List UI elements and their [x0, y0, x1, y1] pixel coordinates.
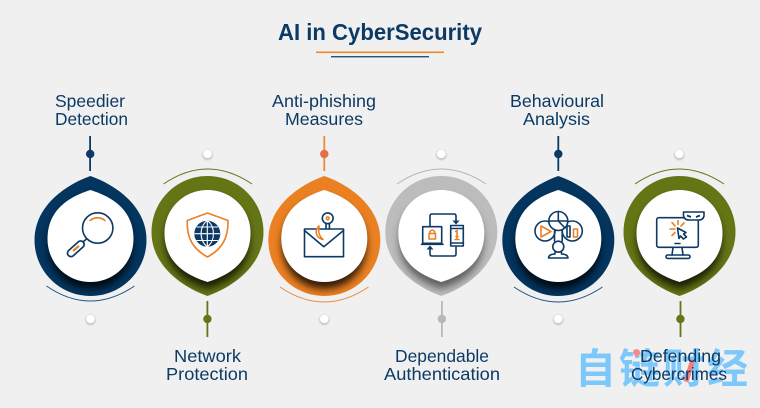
- icon: monitor with mask: [657, 212, 704, 258]
- heading: network protection: Protection: [166, 364, 248, 384]
- drop shape: [152, 176, 264, 296]
- connector: [203, 301, 212, 337]
- title underline: [316, 52, 444, 57]
- panel: anti-phishing measures: [268, 91, 380, 324]
- heading: anti-phishing measures: Anti-phishing: [272, 91, 376, 111]
- drop shape: [268, 176, 380, 296]
- connector: [320, 136, 328, 171]
- panel: network protection: [152, 150, 264, 384]
- connector: [438, 301, 446, 337]
- white dot: [675, 150, 684, 160]
- panel: behavioural analysis: [502, 91, 614, 324]
- connector: [676, 301, 685, 337]
- white dot: [86, 315, 95, 324]
- icon: magnifier: [66, 213, 113, 258]
- watermark: 自链财经: [575, 346, 748, 392]
- heading: defending cybercrimes: Cybercrimes: [631, 364, 727, 384]
- arc: [280, 287, 368, 302]
- heading: speedier detection: Detection: [55, 109, 128, 129]
- drop shape: [624, 176, 736, 296]
- heading: defending cybercrimes: Defending: [640, 346, 721, 366]
- connector: [86, 136, 94, 171]
- white dot: [320, 315, 329, 324]
- title: AI in CyberSecurity: [278, 19, 482, 45]
- panel: defending cybercrimes: [624, 150, 736, 384]
- white dot: [203, 150, 212, 160]
- icon: behaviour analysis: [535, 212, 582, 258]
- panel: speedier detection: [34, 91, 146, 324]
- arc: [635, 169, 724, 184]
- heading: behavioural analysis: Analysis: [523, 109, 590, 129]
- drop shape: [502, 176, 614, 296]
- white dot: [437, 150, 446, 160]
- heading: network protection: Network: [174, 346, 241, 366]
- drop shape: [34, 176, 146, 296]
- arc: [514, 287, 602, 302]
- heading: behavioural analysis: Behavioural: [510, 91, 604, 111]
- panel: dependable authentication: [384, 150, 500, 384]
- heading: anti-phishing measures: Measures: [285, 109, 363, 129]
- icon: phishing envelope: [304, 213, 344, 257]
- white dot: [554, 315, 563, 324]
- icon: device authentication: [422, 214, 463, 256]
- arc: [397, 169, 486, 184]
- icon: shield globe: [187, 213, 228, 257]
- arc: [46, 286, 134, 301]
- heading: dependable authentication: Authentication: [384, 364, 500, 384]
- drop shape: [385, 176, 497, 296]
- connector: [554, 136, 562, 171]
- arc: [164, 169, 252, 184]
- heading: dependable authentication: Dependable: [395, 346, 489, 366]
- heading: speedier detection: Speedier: [55, 91, 125, 111]
